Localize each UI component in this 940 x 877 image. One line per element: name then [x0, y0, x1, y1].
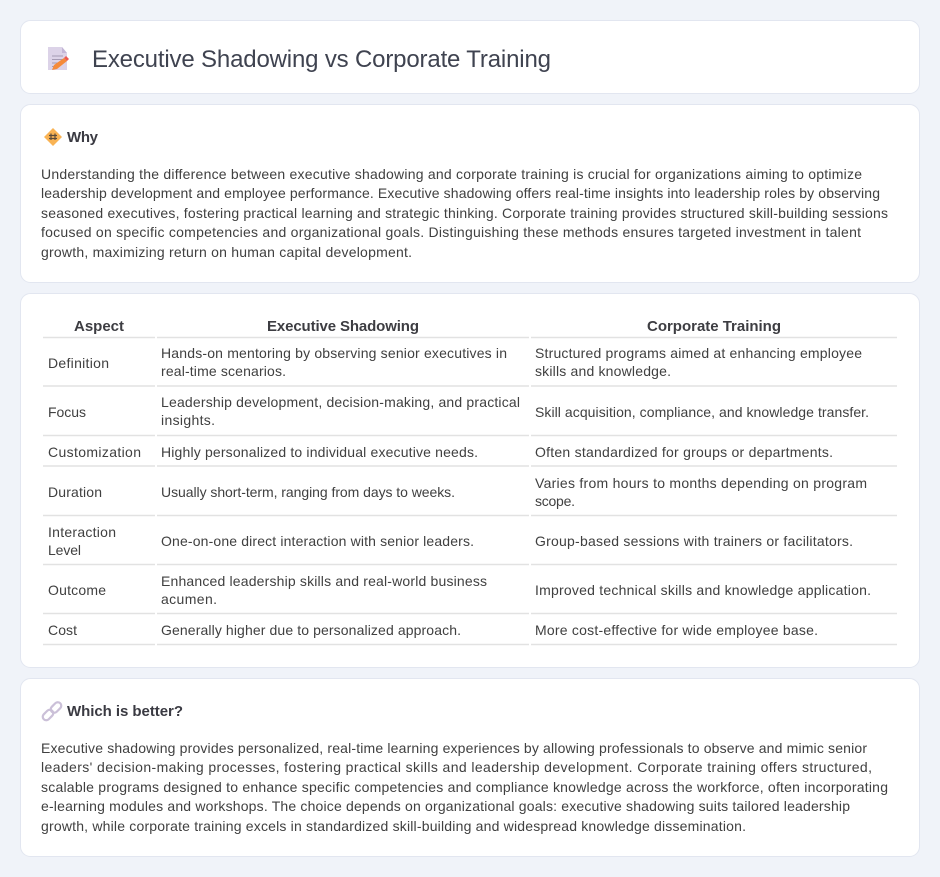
text block: why: seasoned executives, fostering practical learning and strategic thinking. Corporate training provides structured skill-building sessions [41, 205, 888, 221]
text block: which is better: Executive shadowing provides personalized, real-time learning experiences by allowing professionals to observe and mimic senior [41, 740, 867, 756]
heading: why: Why [67, 129, 99, 146]
row: outcome [48, 573, 871, 607]
row: definition: real-time scenarios. [161, 363, 286, 379]
row: duration [48, 475, 867, 509]
row: interaction level: Level [48, 542, 81, 558]
panel: which is better [20, 678, 920, 856]
row: duration: scope. [535, 493, 575, 509]
row: focus [48, 394, 869, 428]
row: customization [48, 444, 833, 460]
row: cost: More cost-effective for wide employee base. [535, 622, 818, 638]
table header: Executive Shadowing [267, 318, 419, 335]
icon: chain link [41, 701, 63, 722]
row: outcome: Enhanced leadership skills and real-world business [161, 573, 487, 589]
row: cost: Cost [48, 622, 77, 638]
text block: which is better: scalable programs designed to enhance specific competencies and compliance knowledge across the workforce, often incorporating [41, 779, 888, 795]
text block: why: growth, maximizing return on human capital development. [41, 244, 412, 260]
text block: why: Understanding the difference between executive shadowing and corporate training is crucial for organizations aiming to optimize [41, 166, 862, 182]
text block: which is better [41, 740, 888, 834]
row: focus: insights. [161, 412, 215, 428]
panel: title header [20, 20, 920, 94]
text block: why [41, 166, 888, 260]
text block: why: focused on specific competencies and organizational goals. Distinguishing these methods ensures targeted investment in talent [41, 224, 861, 240]
row: interaction level: Interaction [48, 524, 116, 540]
panel: comparison table [20, 294, 920, 668]
row: outcome: acumen. [161, 591, 217, 607]
table header [74, 318, 781, 335]
row: interaction level: One-on-one direct interaction with senior leaders. [161, 533, 474, 549]
table header: Corporate Training [647, 318, 781, 335]
row: cost: Generally higher due to personalized approach. [161, 622, 461, 638]
text block: which is better: growth, while corporate training excels in standardized skill-building and widespread knowledge dissemination. [41, 818, 746, 834]
title: Executive Shadowing vs Corporate Training [92, 46, 551, 73]
row: focus: Skill acquisition, compliance, and knowledge transfer. [535, 404, 869, 420]
row: definition: Hands-on mentoring by observing senior executives in [161, 345, 507, 361]
icon: diamond sign [44, 128, 62, 146]
text block: which is better: leaders' decision-making processes, fostering practical skills and leadership development. Corporate training offers structured, [41, 759, 872, 775]
row: interaction level [48, 524, 853, 558]
row: customization: Customization [48, 444, 141, 460]
heading: which is better: Which is better? [67, 703, 183, 720]
table header: Aspect [74, 318, 124, 335]
panel: why [20, 104, 920, 282]
row: cost [48, 622, 818, 638]
text block: why: leadership development and employee performance. Executive shadowing offers real-time insights into leadership roles by observing [41, 185, 880, 201]
icon: document with pencil [48, 47, 69, 70]
row: duration: Varies from hours to months depending on program [535, 475, 867, 491]
row: focus: Leadership development, decision-making, and practical [161, 394, 520, 410]
row: duration: Usually short-term, ranging from days to weeks. [161, 484, 455, 500]
row: outcome: Outcome [48, 582, 106, 598]
row: customization: Often standardized for groups or departments. [535, 444, 833, 460]
row: focus: Focus [48, 404, 86, 420]
row: definition: Structured programs aimed at enhancing employee [535, 345, 862, 361]
row: outcome: Improved technical skills and knowledge application. [535, 582, 871, 598]
row: definition [48, 345, 862, 379]
row: definition: Definition [48, 355, 109, 371]
text block: which is better: e-learning modules and workshops. The choice depends on organizational goals: executive shadowing suits tailored leadership [41, 798, 850, 814]
row: definition: skills and knowledge. [535, 363, 671, 379]
row: duration: Duration [48, 484, 102, 500]
row: customization: Highly personalized to individual executive needs. [161, 444, 478, 460]
row: interaction level: Group-based sessions with trainers or facilitators. [535, 533, 853, 549]
table grid lines [43, 338, 897, 644]
